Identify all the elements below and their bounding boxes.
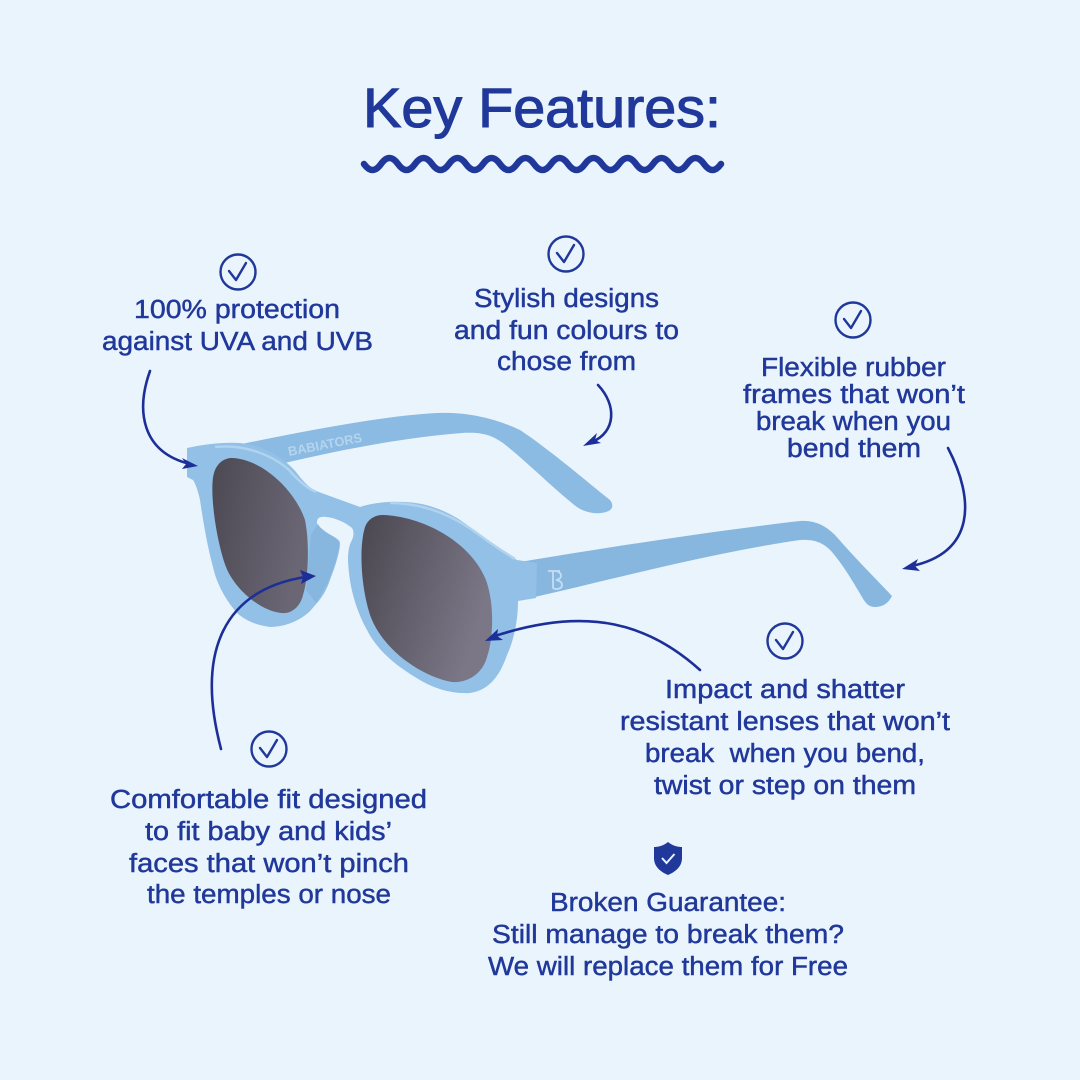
temple logo text: BABIATORS (287, 430, 364, 459)
front frame (187, 443, 537, 693)
arrow: to nose pad (212, 570, 316, 749)
text: to fit baby and kids’ (145, 818, 392, 846)
near temple (520, 521, 892, 607)
text: Still manage to break them? (492, 921, 844, 949)
feature: flexible frames (743, 302, 965, 463)
feature: UV protection (102, 254, 373, 356)
check icon (548, 236, 584, 272)
text (102, 296, 373, 356)
check icon (220, 254, 256, 290)
text: Comfortable fit designed (110, 786, 427, 814)
text: faces that won’t pinch (129, 850, 409, 878)
feature: comfortable fit (110, 732, 427, 909)
text (620, 676, 950, 800)
near temple logo (548, 571, 562, 589)
text: Flexible rubber (761, 354, 947, 382)
text (110, 786, 427, 909)
text: resistant lenses that won’t (620, 708, 950, 736)
text: break when you bend, (645, 740, 925, 768)
text: chose from (497, 348, 636, 376)
check icon (836, 302, 870, 338)
sunglasses (187, 413, 892, 693)
check icon (768, 624, 802, 658)
feature: impact lenses (620, 624, 950, 800)
left lens (212, 458, 308, 613)
text: Stylish designs (474, 285, 659, 313)
text: against UVA and UVB (102, 328, 373, 356)
text: bend them (787, 435, 921, 463)
text (454, 285, 679, 376)
text: Broken Guarantee: (550, 889, 786, 917)
icon: shield (654, 842, 682, 875)
text (743, 354, 965, 463)
wavy underline (364, 158, 721, 170)
frame highlight (215, 447, 515, 559)
text: the temples or nose (147, 881, 391, 909)
arrow: to far temple (583, 385, 611, 446)
text: 100% protection (134, 296, 340, 324)
check icon (252, 732, 286, 766)
right lens (361, 515, 492, 682)
text: break when you (756, 408, 951, 436)
nose pad (306, 524, 339, 603)
arrow: to frame corner (143, 371, 198, 469)
feature: stylish designs (454, 236, 679, 376)
far temple (237, 413, 612, 513)
text (488, 889, 848, 981)
text: twist or step on them (654, 772, 916, 800)
text: We will replace them for Free (488, 953, 848, 981)
title: Key Features: (363, 76, 721, 139)
arrow: to right lens (485, 621, 700, 670)
broken guarantee (488, 842, 848, 981)
arrow: to near temple (902, 448, 965, 571)
text: and fun colours to (454, 317, 679, 345)
text: frames that won’t (743, 381, 965, 409)
text: Impact and shatter (665, 676, 906, 704)
